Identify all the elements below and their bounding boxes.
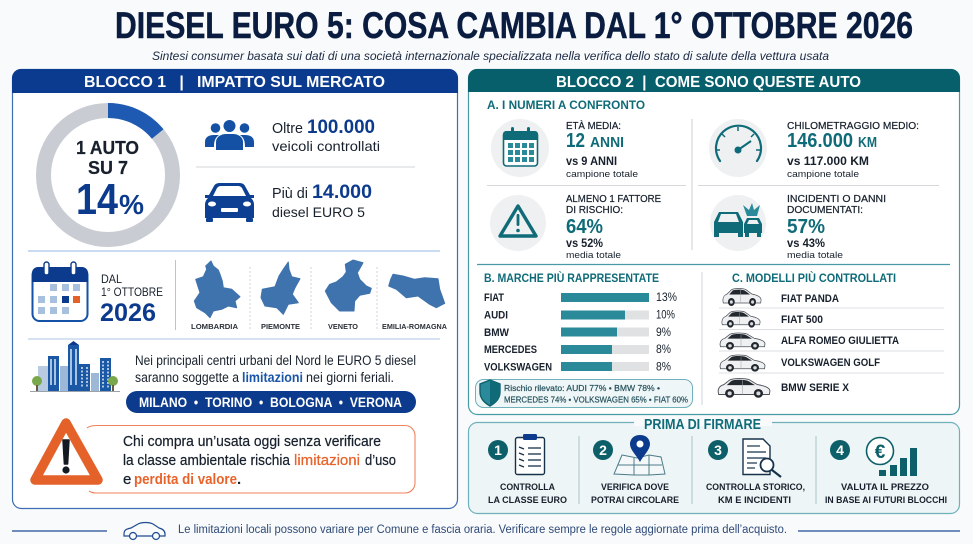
icon: warning (490, 195, 546, 251)
bar chart: brands: 9% (656, 327, 671, 339)
footer (12, 522, 960, 540)
donut chart: 14 percent: 14 (76, 175, 118, 224)
stat: chilometraggio: vs 117.000 KM (787, 154, 869, 168)
stat: incidenti: INCIDENTI O DANNI (787, 193, 886, 205)
step 4 (825, 438, 947, 506)
icon: document magnifier (743, 439, 781, 477)
map: Piemonte: PIEMONTE (261, 322, 300, 331)
date text: DAL (101, 272, 122, 286)
step 2: 2 (599, 442, 607, 458)
risk note: MERCEDES 74% • VOLKSWAGEN 65% • FIAT 60% (504, 394, 688, 404)
city pill: MILANO • TORINO • BOLOGNA • VERONA (139, 395, 402, 410)
stat: fattore di rischio: ALMENO 1 FATTORE (566, 193, 661, 205)
bar chart: brands: 13% (656, 292, 677, 304)
icon: warning triangle (35, 423, 98, 480)
stat: 14.000 diesel: diesel EURO 5 (272, 204, 365, 220)
step 2: POTRAI CIRCOLARE (591, 495, 679, 506)
callout: warning: d’uso (365, 452, 396, 469)
stat: chilometraggio: CHILOMETRAGGIO MEDIO: (787, 120, 919, 132)
donut chart: 14 percent: % (119, 189, 144, 220)
stat: 14.000 diesel: 14.000 (312, 182, 372, 203)
stat: chilometraggio: campione totale (787, 169, 859, 180)
section B heading: B. MARCHE PIÙ RAPPRESENTATE (484, 270, 659, 285)
model list: ALFA ROMEO GIULIETTA (781, 335, 899, 347)
map: Emilia-Romagna (382, 274, 447, 331)
car: Volkswagen Golf (720, 355, 765, 372)
stat: eta media: ETÀ MEDIA: (566, 119, 621, 132)
bar chart: brands: 8% (656, 362, 671, 374)
map: Piemonte (261, 262, 300, 331)
bar chart: brands (484, 292, 677, 374)
risk note: Rischio rilevato: AUDI 77% • BMW 78% • (504, 383, 660, 393)
step 2: VERIFICA DOVE (601, 482, 669, 493)
map: Veneto (325, 260, 371, 331)
icon: car front (205, 183, 254, 222)
car: Alfa Romeo Giulietta (720, 333, 765, 350)
icon: speedometer (709, 119, 767, 177)
blocco 2 header: BLOCCO 2 | COME SONO QUESTE AUTO (556, 74, 861, 91)
donut chart: 14 percent (44, 110, 172, 240)
model list (718, 288, 899, 398)
map: Emilia-Romagna: EMILIA-ROMAGNA (382, 322, 447, 331)
stat: fattore di rischio: 64% (566, 216, 603, 238)
section A heading: A. I NUMERI A CONFRONTO (487, 98, 645, 112)
icon: people (205, 120, 254, 150)
stat: 100.000 vehicles: 100.000 (307, 117, 375, 138)
car: Fiat 500 (722, 311, 760, 328)
stat: eta media: campione totale (566, 169, 638, 180)
callout: warning: . (237, 471, 241, 488)
stat: incidenti: media totale (787, 250, 843, 261)
callout: warning: la classe ambientale rischia (123, 452, 291, 469)
text: urban limitations: saranno soggette a (135, 370, 239, 385)
donut chart: 14 percent: 1 AUTO (76, 138, 139, 158)
bar chart: brands: 8% (656, 344, 671, 356)
icon: euro and rising bars: € (875, 442, 886, 463)
model list: FIAT 500 (781, 314, 823, 326)
step 3: CONTROLLA STORICO, (706, 482, 805, 493)
step 1: CONTROLLA (500, 482, 555, 493)
text: urban limitations: nei giorni feriali. (306, 370, 394, 385)
step 3: 3 (714, 442, 722, 458)
stat: chilometraggio (787, 120, 919, 180)
stat: chilometraggio: 146.000 (787, 130, 853, 152)
footer: Le limitazioni locali possono variare per Comune e fascia oraria. Verificare sempre le regole aggiornate prima dell’acquisto. (178, 524, 787, 536)
city pill (126, 391, 416, 413)
bar chart: brands: 10% (656, 310, 675, 322)
text: urban limitations (135, 353, 416, 385)
panel: prima di firmare (468, 417, 960, 514)
date text: 2026 (100, 299, 156, 327)
date text (100, 272, 163, 327)
stat: incidenti: vs 43% (787, 236, 825, 250)
stat: eta media: vs 9 ANNI (566, 154, 617, 168)
bar chart: brands: FIAT (484, 292, 504, 304)
text: urban limitations: Nei principali centri urbani del Nord le EURO 5 diesel (135, 353, 416, 368)
map: Veneto: VENETO (328, 322, 358, 331)
model list: FIAT PANDA (781, 293, 839, 305)
step 3 (706, 439, 805, 506)
bar chart: brands: BMW (484, 327, 510, 339)
icon: city skyline (30, 341, 120, 392)
icon: clipboard (516, 434, 544, 474)
callout: warning: perdita di valore (134, 471, 237, 488)
panel: blocco 1 impatto sul mercato (12, 69, 458, 508)
icon: map pin (614, 435, 665, 475)
icon: shield (480, 380, 500, 406)
date text: 1° OTTOBRE (101, 285, 163, 299)
risk note (476, 380, 692, 408)
bar chart: brands: AUDI (484, 310, 508, 322)
stat: fattore di rischio (566, 193, 661, 261)
stat: chilometraggio: KM (858, 134, 877, 151)
model list: BMW SERIE X (781, 382, 850, 394)
blocco 1 header: BLOCCO 1 | IMPATTO SUL MERCATO (84, 74, 385, 91)
stat: 100.000 vehicles (272, 117, 380, 154)
stat: fattore di rischio: vs 52% (566, 236, 603, 250)
step 2 (591, 435, 679, 506)
panel: blocco 2 come sono queste auto (468, 69, 960, 414)
subtitle: Sintesi consumer basata sui dati di una società internazionale specializzata nella verifica dello stato di salute della vettura usata (152, 49, 829, 63)
step 4: IN BASE AI FUTURI BLOCCHI (825, 495, 947, 506)
callout: warning: e (123, 471, 131, 488)
icon: car collision (710, 195, 766, 251)
callout: warning: limitazioni (294, 452, 360, 469)
stat: incidenti: 57% (787, 216, 825, 238)
heading: PRIMA DI FIRMARE (644, 417, 761, 433)
icon: car outline (124, 522, 165, 540)
map: Lombardia (191, 261, 240, 331)
stat: fattore di rischio: media totale (566, 250, 621, 261)
donut chart: 14 percent: SU 7 (88, 158, 128, 178)
step 4: VALUTA IL PREZZO (841, 482, 929, 493)
callout: warning: Chi compra un’usata oggi senza verificare (123, 433, 381, 450)
stat: incidenti: DOCUMENTATI: (787, 204, 863, 216)
icon: calendar (32, 262, 88, 321)
model list: VOLKSWAGEN GOLF (781, 357, 880, 369)
car: BMW Serie X (718, 379, 770, 398)
icon: calendar age (491, 119, 549, 177)
car: Fiat Panda (723, 288, 761, 306)
stat: incidenti (787, 193, 886, 261)
stat: eta media: 12 (566, 130, 585, 152)
stat: 100.000 vehicles: Oltre (272, 121, 303, 137)
blocco 1 header (12, 69, 458, 93)
step 4: 4 (836, 442, 844, 458)
step 1: LA CLASSE EURO (488, 495, 567, 506)
map: Lombardia: LOMBARDIA (191, 322, 239, 331)
section C heading: C. MODELLI PIÙ CONTROLLATI (732, 270, 896, 285)
step 3: KM E INCIDENTI (718, 495, 791, 506)
stat: eta media: ANNI (590, 134, 624, 151)
stat: 100.000 vehicles: veicoli controllati (272, 138, 380, 154)
step 1 (488, 434, 567, 506)
callout: warning (35, 423, 415, 493)
stat: fattore di rischio: DI RISCHIO: (566, 204, 623, 216)
blocco 2 header (468, 69, 960, 92)
text: urban limitations: limitazioni (242, 370, 303, 385)
stat: eta media (566, 119, 638, 180)
step 1: 1 (494, 442, 502, 458)
stat: 14.000 diesel (272, 182, 372, 220)
bar chart: brands: MERCEDES (484, 344, 537, 356)
stat: 14.000 diesel: Più di (272, 186, 308, 202)
bar chart: brands: VOLKSWAGEN (484, 362, 552, 374)
